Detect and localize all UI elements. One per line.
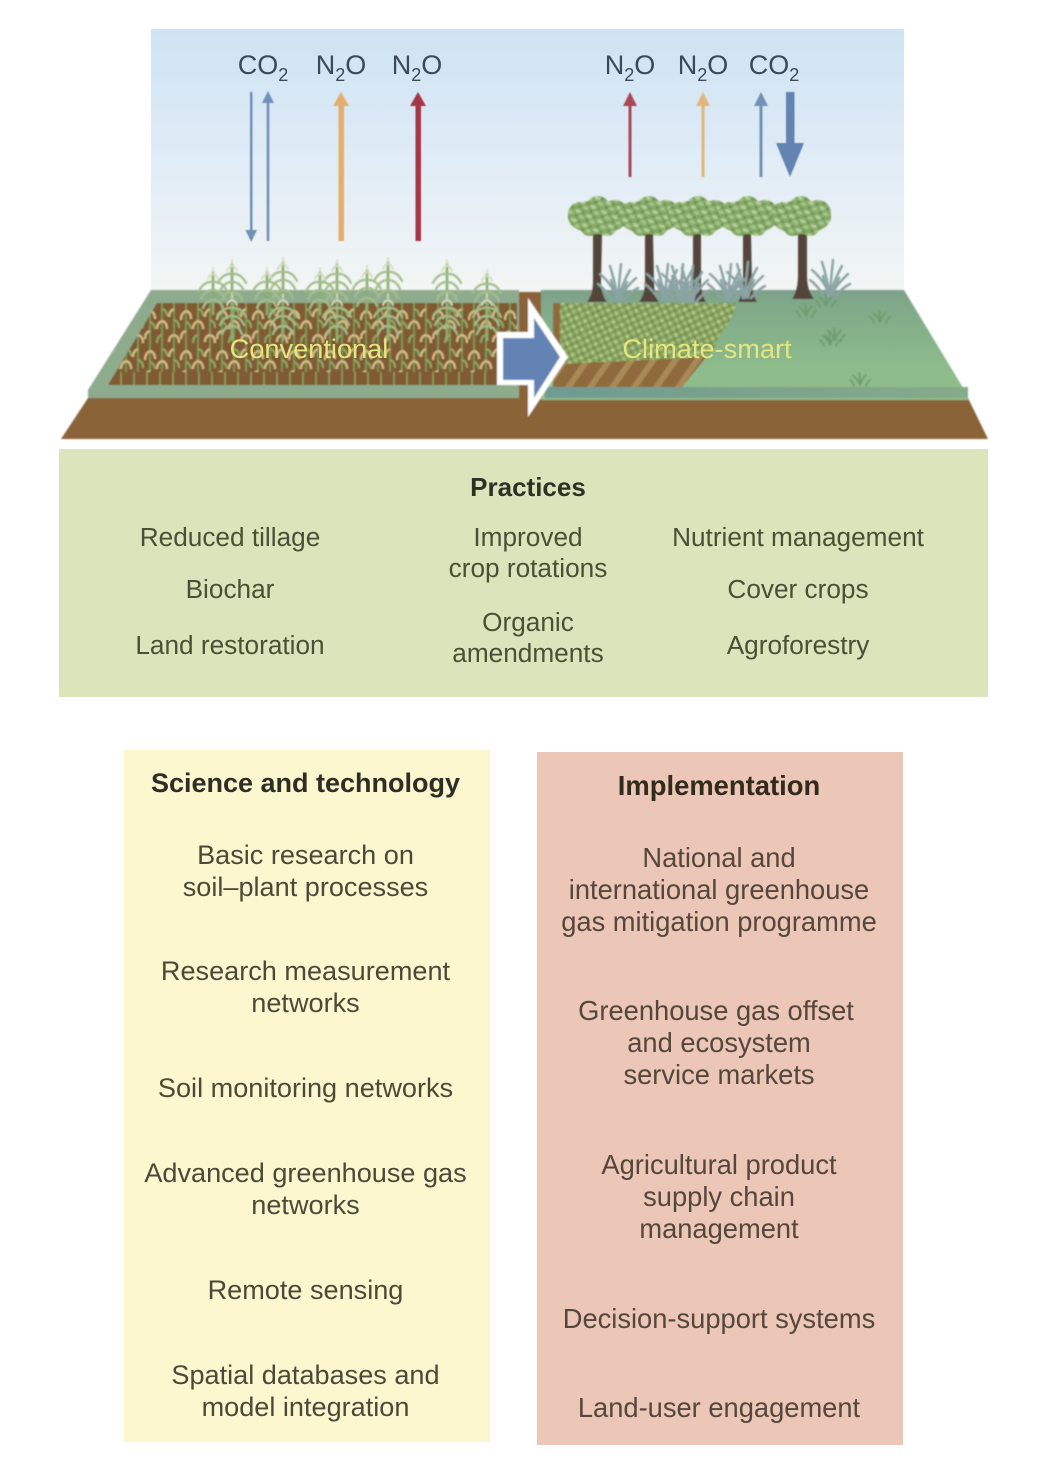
item: spatial databases: [171, 1359, 440, 1422]
item: greenhouse gas networks: networks: [251, 1189, 360, 1220]
CO2 large down arrow: [776, 92, 804, 177]
practices column 3: Cover crops: [727, 574, 869, 604]
item: mitigation programme: National and: [642, 842, 796, 873]
heading: Science and technology: Science and technology: [151, 768, 460, 798]
gap between fields: [519, 292, 541, 400]
item: offset markets: Greenhouse gas offset: [578, 995, 854, 1026]
item: greenhouse gas networks: [144, 1157, 467, 1220]
soil and stems at the front of the field: [108, 372, 517, 385]
label CO2: 2: [278, 65, 288, 85]
field edge grass fringe: [545, 387, 968, 398]
item: basic research: [183, 839, 428, 902]
tall corn plants on the horizon: [199, 258, 501, 340]
conventional crop rows: [108, 303, 517, 385]
practices column 2: amendments: [452, 638, 604, 668]
item: mitigation programme: international greenhouse: [569, 874, 869, 905]
CO2 down arrow: [245, 92, 257, 242]
gas labels: climate-smart: [605, 50, 799, 85]
item: supply chain: supply chain: [643, 1181, 795, 1212]
item: research networks: [161, 955, 451, 1018]
item: mitigation programme: [561, 842, 877, 937]
panel: practices: [59, 449, 988, 697]
panel: conventional field: [88, 258, 519, 398]
practices column 2: Improved: [473, 522, 583, 552]
gas labels: conventional: [238, 50, 442, 85]
item: spatial databases: Spatial databases and: [171, 1359, 440, 1390]
item: mitigation programme: gas mitigation programme: [561, 906, 877, 937]
practices column 1: [135, 522, 325, 660]
item: spatial databases: model integration: [202, 1391, 409, 1422]
label CO2: CO: [749, 50, 789, 80]
label N2O orange: N: [316, 50, 335, 80]
N2O red arrow: [410, 92, 426, 241]
illustration: field cross-section: [61, 196, 988, 439]
soil base: [61, 398, 988, 439]
tree canopy: [568, 196, 831, 236]
item: basic research: Basic research on: [197, 839, 414, 870]
CO2 up arrow: [262, 91, 274, 241]
label N2O orange: N: [678, 50, 697, 80]
item: research networks: Research measurement: [161, 955, 451, 986]
label N2O red: 2: [411, 65, 421, 85]
label N2O red: N: [392, 50, 411, 80]
N2O orange arrow: [696, 92, 710, 177]
practices column 1: Reduced tillage: [140, 522, 320, 552]
CO2 up arrow: [754, 92, 768, 177]
item: offset markets: [578, 995, 854, 1090]
transition arrow: [497, 298, 568, 417]
practices column 3: Nutrient management: [672, 522, 925, 552]
item: soil monitoring: Soil monitoring networks: [158, 1072, 453, 1103]
practices column 3: [672, 522, 925, 660]
grassland: [541, 290, 968, 400]
item: land-user engagement: Land-user engagement: [578, 1392, 861, 1423]
sky background: [151, 29, 904, 294]
heading: Practices: Practices: [470, 472, 586, 502]
soil edge: [553, 303, 560, 370]
N2O red arrow: [623, 92, 637, 177]
label N2O red: O: [421, 50, 442, 80]
science background: [124, 750, 490, 1442]
practices column 2: crop rotations: [449, 553, 607, 583]
tilled soil rows: [553, 345, 716, 387]
label N2O orange: 2: [335, 65, 345, 85]
transition arrow fill: [503, 318, 560, 398]
practices background: [59, 449, 988, 697]
label CO2: CO: [238, 50, 278, 80]
implementation background: [537, 752, 903, 1445]
practices column 2: [449, 522, 607, 668]
implementation text: [561, 770, 877, 1423]
label N2O orange: O: [345, 50, 366, 80]
gas arrows: climate-smart: [623, 92, 804, 177]
tree trunks: [587, 234, 814, 302]
item: research networks: networks: [251, 987, 360, 1018]
item: remote sensing: Remote sensing: [208, 1274, 403, 1305]
panel: climate-smart field: [541, 196, 968, 400]
item: decision support: Decision-support systems: [563, 1303, 875, 1334]
gas arrows: conventional: [245, 91, 426, 242]
label N2O red: N: [605, 50, 624, 80]
item: offset markets: and ecosystem: [627, 1027, 811, 1058]
item: basic research: soil–plant processes: [183, 871, 428, 902]
item: supply chain: management: [639, 1213, 799, 1244]
label CO2: 2: [789, 65, 799, 85]
practices column 2: Organic: [482, 607, 574, 637]
label N2O orange: O: [707, 50, 728, 80]
label: Climate-smart: Climate-smart: [622, 333, 792, 364]
conventional field border: [88, 290, 519, 398]
item: offset markets: service markets: [623, 1059, 815, 1090]
label N2O red: O: [634, 50, 655, 80]
item: supply chain: Agricultural product: [601, 1149, 837, 1180]
practices text: [135, 472, 925, 668]
practices column 1: Biochar: [186, 574, 275, 604]
grass tufts: [796, 294, 890, 386]
label: Conventional: Conventional: [230, 333, 388, 364]
panel: implementation: [537, 752, 903, 1445]
heading: Implementation: Implementation: [618, 770, 820, 801]
item: supply chain: [601, 1149, 837, 1244]
N2O orange arrow: [333, 92, 349, 241]
item: greenhouse gas networks: Advanced greenhouse gas: [144, 1157, 467, 1188]
practices column 3: Agroforestry: [727, 630, 870, 660]
science text: [144, 768, 467, 1422]
panel: science and technology: [124, 750, 490, 1442]
practices column 1: Land restoration: [135, 630, 325, 660]
dense crop strip: [560, 303, 735, 364]
label N2O red: 2: [624, 65, 634, 85]
understorey grasses: [598, 260, 850, 302]
label N2O orange: 2: [697, 65, 707, 85]
